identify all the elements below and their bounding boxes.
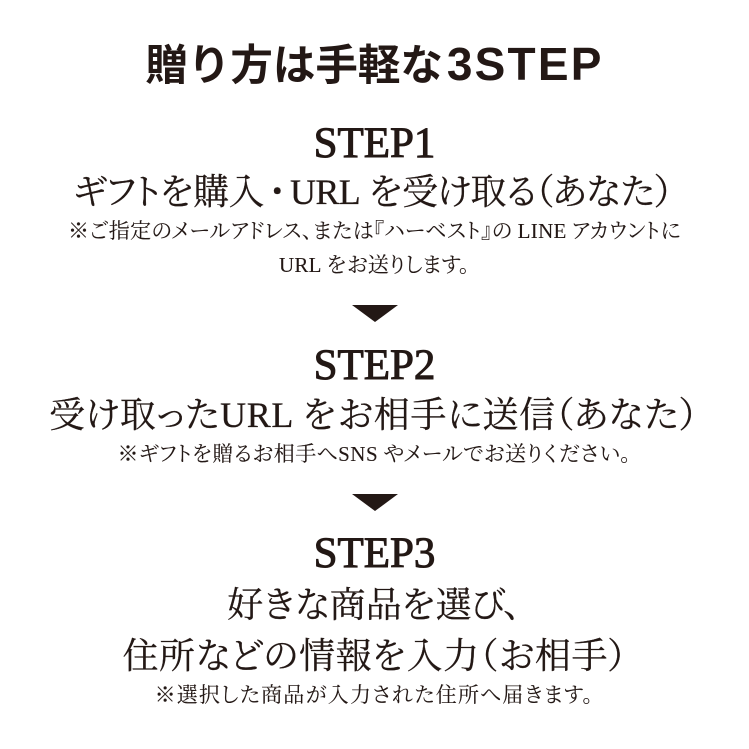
step 1 note: URLをお送りします。 bbox=[279, 253, 470, 277]
step 3 description line 2: 住所などの情報を入力（お相手） bbox=[122, 636, 627, 676]
step 3 note: ※選択した商品が入力された住所へ届きます。 bbox=[155, 683, 594, 707]
step 3 heading: STEP3 bbox=[314, 530, 435, 577]
step 3 description line 1: 好きな商品を選び、 bbox=[227, 585, 522, 625]
step 1 heading: STEP1 bbox=[314, 120, 435, 167]
step 1 description: ギフトを購入･URLを受け取る（あなた） bbox=[73, 172, 672, 212]
step 1 note: ※ご指定のメールアドレス、または『ハーベスト』のLINEアカウントに bbox=[68, 219, 681, 243]
step 2 heading: STEP2 bbox=[314, 342, 435, 389]
step 1 note bbox=[68, 219, 681, 277]
title: 贈り方は手軽な3STEP bbox=[145, 38, 604, 90]
arrow 1 bbox=[352, 305, 398, 322]
step 2 description: 受け取ったURLをお相手に送信（あなた） bbox=[49, 395, 698, 435]
arrow 2 bbox=[352, 494, 398, 511]
step 2 note: ※ギフトを贈るお相手へSNSやメールでお送りください。 bbox=[118, 442, 631, 466]
